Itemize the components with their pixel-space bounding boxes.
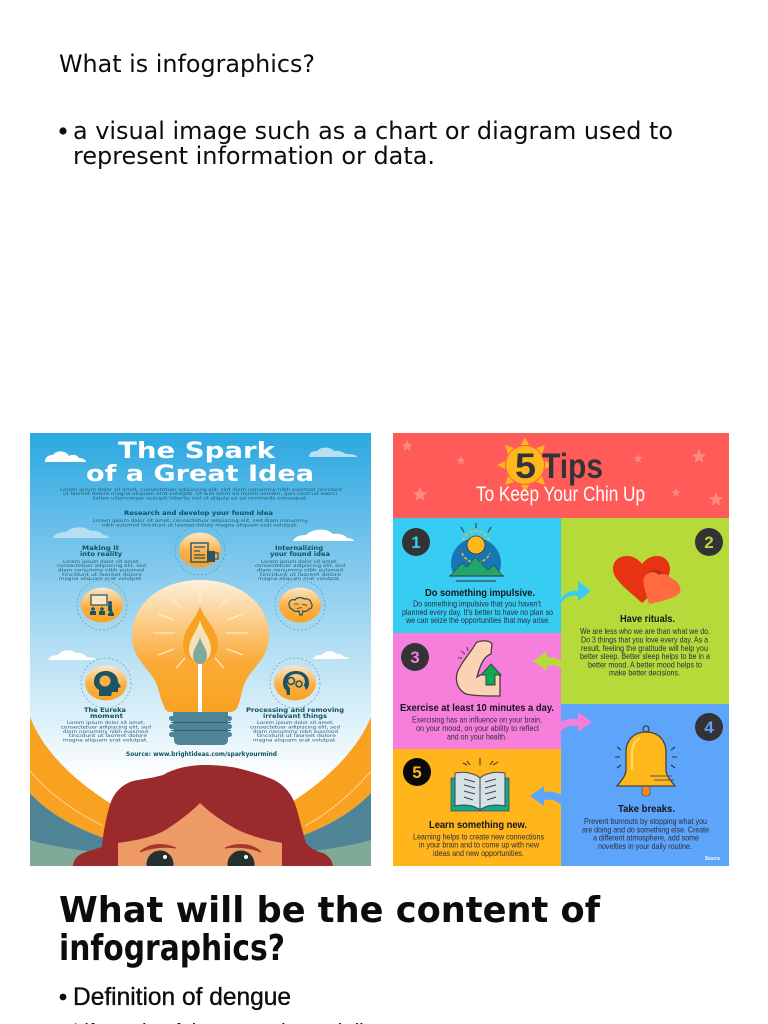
tip 5 text: Learn something new. — [429, 819, 527, 831]
arrow: tip 2 to tip 3 — [533, 651, 561, 671]
text block: the eureka moment: tincidunt ut laoreet dolore — [69, 733, 147, 739]
heading: what will be the content of infographics — [59, 890, 600, 969]
tip 5 text — [413, 819, 544, 858]
tip 4 text: a different atmosphere, add some — [593, 834, 699, 842]
content bullet: definition of dengue: Definition of dengue — [73, 983, 291, 1011]
icon: sun over mountains — [449, 523, 504, 581]
clouds — [45, 448, 357, 660]
text block: internalizing your found idea: Lorem ipsum dolor sit amet, — [261, 559, 339, 565]
text block: making it into reality: into reality — [80, 551, 122, 558]
tip 3 panel: exercise — [393, 633, 561, 749]
icon: newspaper and mug — [175, 525, 225, 575]
tip 2 text: better mood. A better mood helps to — [588, 660, 702, 670]
tip 1 text: Do something impulsive. — [425, 587, 535, 599]
title: what is infographics: What is infographics? — [59, 50, 315, 78]
text block: internalizing your found idea — [255, 545, 345, 582]
text block: internalizing your found idea: tincidunt ut laoreet dolore — [260, 572, 341, 578]
tips title: To Keep Your Chin Up — [476, 483, 645, 506]
poster intro text: Lorem ipsum dolor sit amet, consectetuer adipiscing elit, sed diam nonummy nibh euismod tincidunt — [60, 487, 342, 493]
text block: internalizing your found idea: your found idea — [270, 551, 330, 558]
tip 2 text: better sleep. Better sleep helps to be in a — [580, 652, 710, 661]
tip 5 text: Learning helps to create new connections — [413, 832, 544, 842]
tip 3 text: Exercise at least 10 minutes a day. — [400, 702, 554, 714]
text block: processing and removing irrelevant things: irrelevant things — [263, 713, 327, 720]
poster title — [87, 441, 312, 482]
tip 5 text: ideas and new opportunities. — [433, 849, 524, 858]
text block: processing and removing irrelevant things: diam nonummy nibh euismod — [253, 729, 338, 735]
tips header — [393, 433, 729, 518]
tip 1 text: Do something impulsive that you haven't — [413, 600, 542, 608]
tip 1 text: planned every day. It's better to have no plan so — [402, 608, 553, 617]
tip 3 text — [400, 702, 554, 742]
panel: 5 tips to keep your chin up poster — [393, 433, 729, 866]
text block: internalizing your found idea: diam nonummy nibh euismod — [257, 568, 343, 574]
text block: making it into reality — [57, 545, 146, 582]
tip 2 text: Have rituals. — [620, 613, 675, 625]
source line: Source: www.brightideas.com/sparkyourmind — [126, 751, 277, 758]
background arches — [30, 717, 371, 866]
tip 2 text: make better decisions. — [609, 668, 680, 678]
source label: Source — [705, 856, 720, 862]
poster title: The Spark — [118, 439, 277, 464]
definition bullet: represent information or data. — [73, 142, 435, 170]
text block: the eureka moment: Lorem ipsum dolor sit amet, — [67, 720, 146, 726]
number badge 5 — [403, 758, 431, 786]
icon: brain — [275, 580, 325, 630]
number badge 3 — [401, 643, 429, 671]
heading: what will be the content of infographics: What will be the content of — [59, 890, 600, 931]
tip 2 text: result, feeling the gratitude will help you — [581, 644, 708, 653]
tips title — [476, 447, 645, 506]
definition bullet: a visual image such as a chart or diagram used to — [73, 117, 673, 145]
tip 5 text: in your brain and to come up with new — [419, 840, 539, 850]
text block: processing and removing irrelevant things: consectetuer adipiscing elit, sed — [250, 724, 340, 730]
arrow: tip 4 to tip 5 — [530, 786, 561, 806]
research heading and text — [93, 510, 308, 528]
research heading and text: Lorem ipsum dolor sit amet, consectetuer adipiscing elit, sed diam nonummy — [93, 518, 308, 524]
text block: internalizing your found idea: Internalizing — [275, 545, 323, 552]
research heading and text: Research and develop your found idea — [124, 510, 273, 517]
icon: sun — [497, 437, 553, 492]
tip 2 text: Do 3 things that you love every day. As a — [581, 636, 708, 644]
tip 4 text: Take breaks. — [618, 803, 675, 815]
poster title: of a Great Idea — [86, 462, 314, 487]
text block: the eureka moment: magna aliquam erat volutpat. — [63, 738, 148, 744]
tip 1 text: we can seize the opportunities that may arise. — [405, 616, 550, 625]
tips title: 5 — [515, 447, 536, 486]
number badge 3: 3 — [410, 648, 420, 667]
definition bullet — [59, 117, 673, 170]
text block: processing and removing irrelevant things: Lorem ipsum dolor sit amet, — [257, 720, 335, 726]
icon: hearts — [613, 556, 680, 604]
text block: the eureka moment: consectetuer adipiscing elit, sed — [61, 724, 151, 730]
text block: the eureka moment: moment — [90, 713, 123, 720]
poster intro text: ut laoreet dolore magna aliquam erat volutpat. Ut wisi enim ad minim veniam, quis nostrud exerci — [63, 491, 337, 497]
tip 5 panel: learn something new — [393, 749, 561, 866]
arrow: tip 1 to tip 2 — [561, 581, 591, 603]
text block: the eureka moment: The Eureka — [84, 707, 126, 714]
text block: the eureka moment — [61, 707, 151, 744]
text block: making it into reality: tincidunt ut laoreet dolore — [62, 572, 142, 578]
tip 3 text: on your mood, on your ability to reflect — [416, 724, 540, 733]
text block: making it into reality: diam nonummy nibh euismod — [58, 568, 144, 574]
icon: flexed arm — [456, 641, 501, 696]
character: woman with red hair — [73, 765, 333, 866]
number badge 2: 2 — [704, 533, 714, 552]
icon: eureka head — [81, 658, 131, 708]
tip 3 text: Exercising has an influence on your brain, — [412, 716, 542, 724]
tip 3 text: and on your health. — [447, 732, 507, 742]
number badge 1: 1 — [411, 533, 421, 552]
text block: processing and removing irrelevant things — [246, 707, 344, 744]
text block: making it into reality: Making it — [82, 545, 119, 552]
tip 2 text — [580, 613, 710, 678]
text block: the eureka moment: diam nonummy nibh euismod — [63, 729, 148, 735]
arrow: tip 3 to tip 4 — [561, 712, 592, 732]
tip 4 text: Prevent burnouts by stopping what you — [584, 817, 707, 826]
number badge 1 — [402, 528, 430, 556]
research heading and text: nibh euismod tincidunt ut laoreet dolore magna aliquam erat volutpat. — [102, 522, 298, 528]
number badge 4: 4 — [704, 718, 714, 737]
text block: internalizing your found idea: magna aliquam erat volutpat. — [258, 576, 341, 582]
icon: gears in head — [270, 658, 320, 708]
tip 4 text: are doing and do something else. Create — [582, 826, 709, 834]
text block: making it into reality: Lorem ipsum dolor sit amet, — [63, 559, 141, 565]
text block: making it into reality: consectetuer adipiscing elit, sed — [57, 563, 146, 569]
number badge 4 — [695, 713, 723, 741]
poster intro text: tation ullamcorper suscipit lobortis nisl ut aliquip ex ea commodo consequat. — [93, 496, 308, 502]
text block: processing and removing irrelevant things: Processing and removing — [246, 707, 344, 714]
tip 4 panel: take breaks — [561, 704, 729, 866]
poster intro text — [60, 488, 342, 500]
text block: processing and removing irrelevant things: magna aliquam erat volutpat. — [253, 738, 337, 744]
icon: open book — [451, 758, 509, 811]
number badge 5: 5 — [412, 763, 422, 782]
text block: making it into reality: magna aliquam erat volutpat. — [59, 576, 143, 582]
tip 2 panel: have rituals — [561, 518, 729, 704]
number badge 2 — [695, 528, 723, 556]
icon: presenter and audience — [77, 580, 127, 630]
tip 1 text — [402, 587, 553, 625]
text block: processing and removing irrelevant things: tincidunt ut laoreet dolore — [257, 733, 336, 739]
lightbulb — [132, 580, 269, 745]
panel: the spark of a great idea poster — [30, 433, 371, 878]
tips title: Tips — [542, 447, 603, 486]
text block: internalizing your found idea: consectetuer adipiscing elit, sed — [255, 563, 345, 569]
icon: bell — [615, 726, 677, 796]
tip 4 text: novelties in your daily routine. — [598, 842, 692, 851]
tip 1 panel: do something impulsive — [393, 518, 561, 633]
tip 4 text — [582, 803, 709, 851]
tip 2 text: We are less who we are than what we do. — [580, 627, 710, 636]
heading: what will be the content of infographics: infographics? — [59, 928, 285, 969]
